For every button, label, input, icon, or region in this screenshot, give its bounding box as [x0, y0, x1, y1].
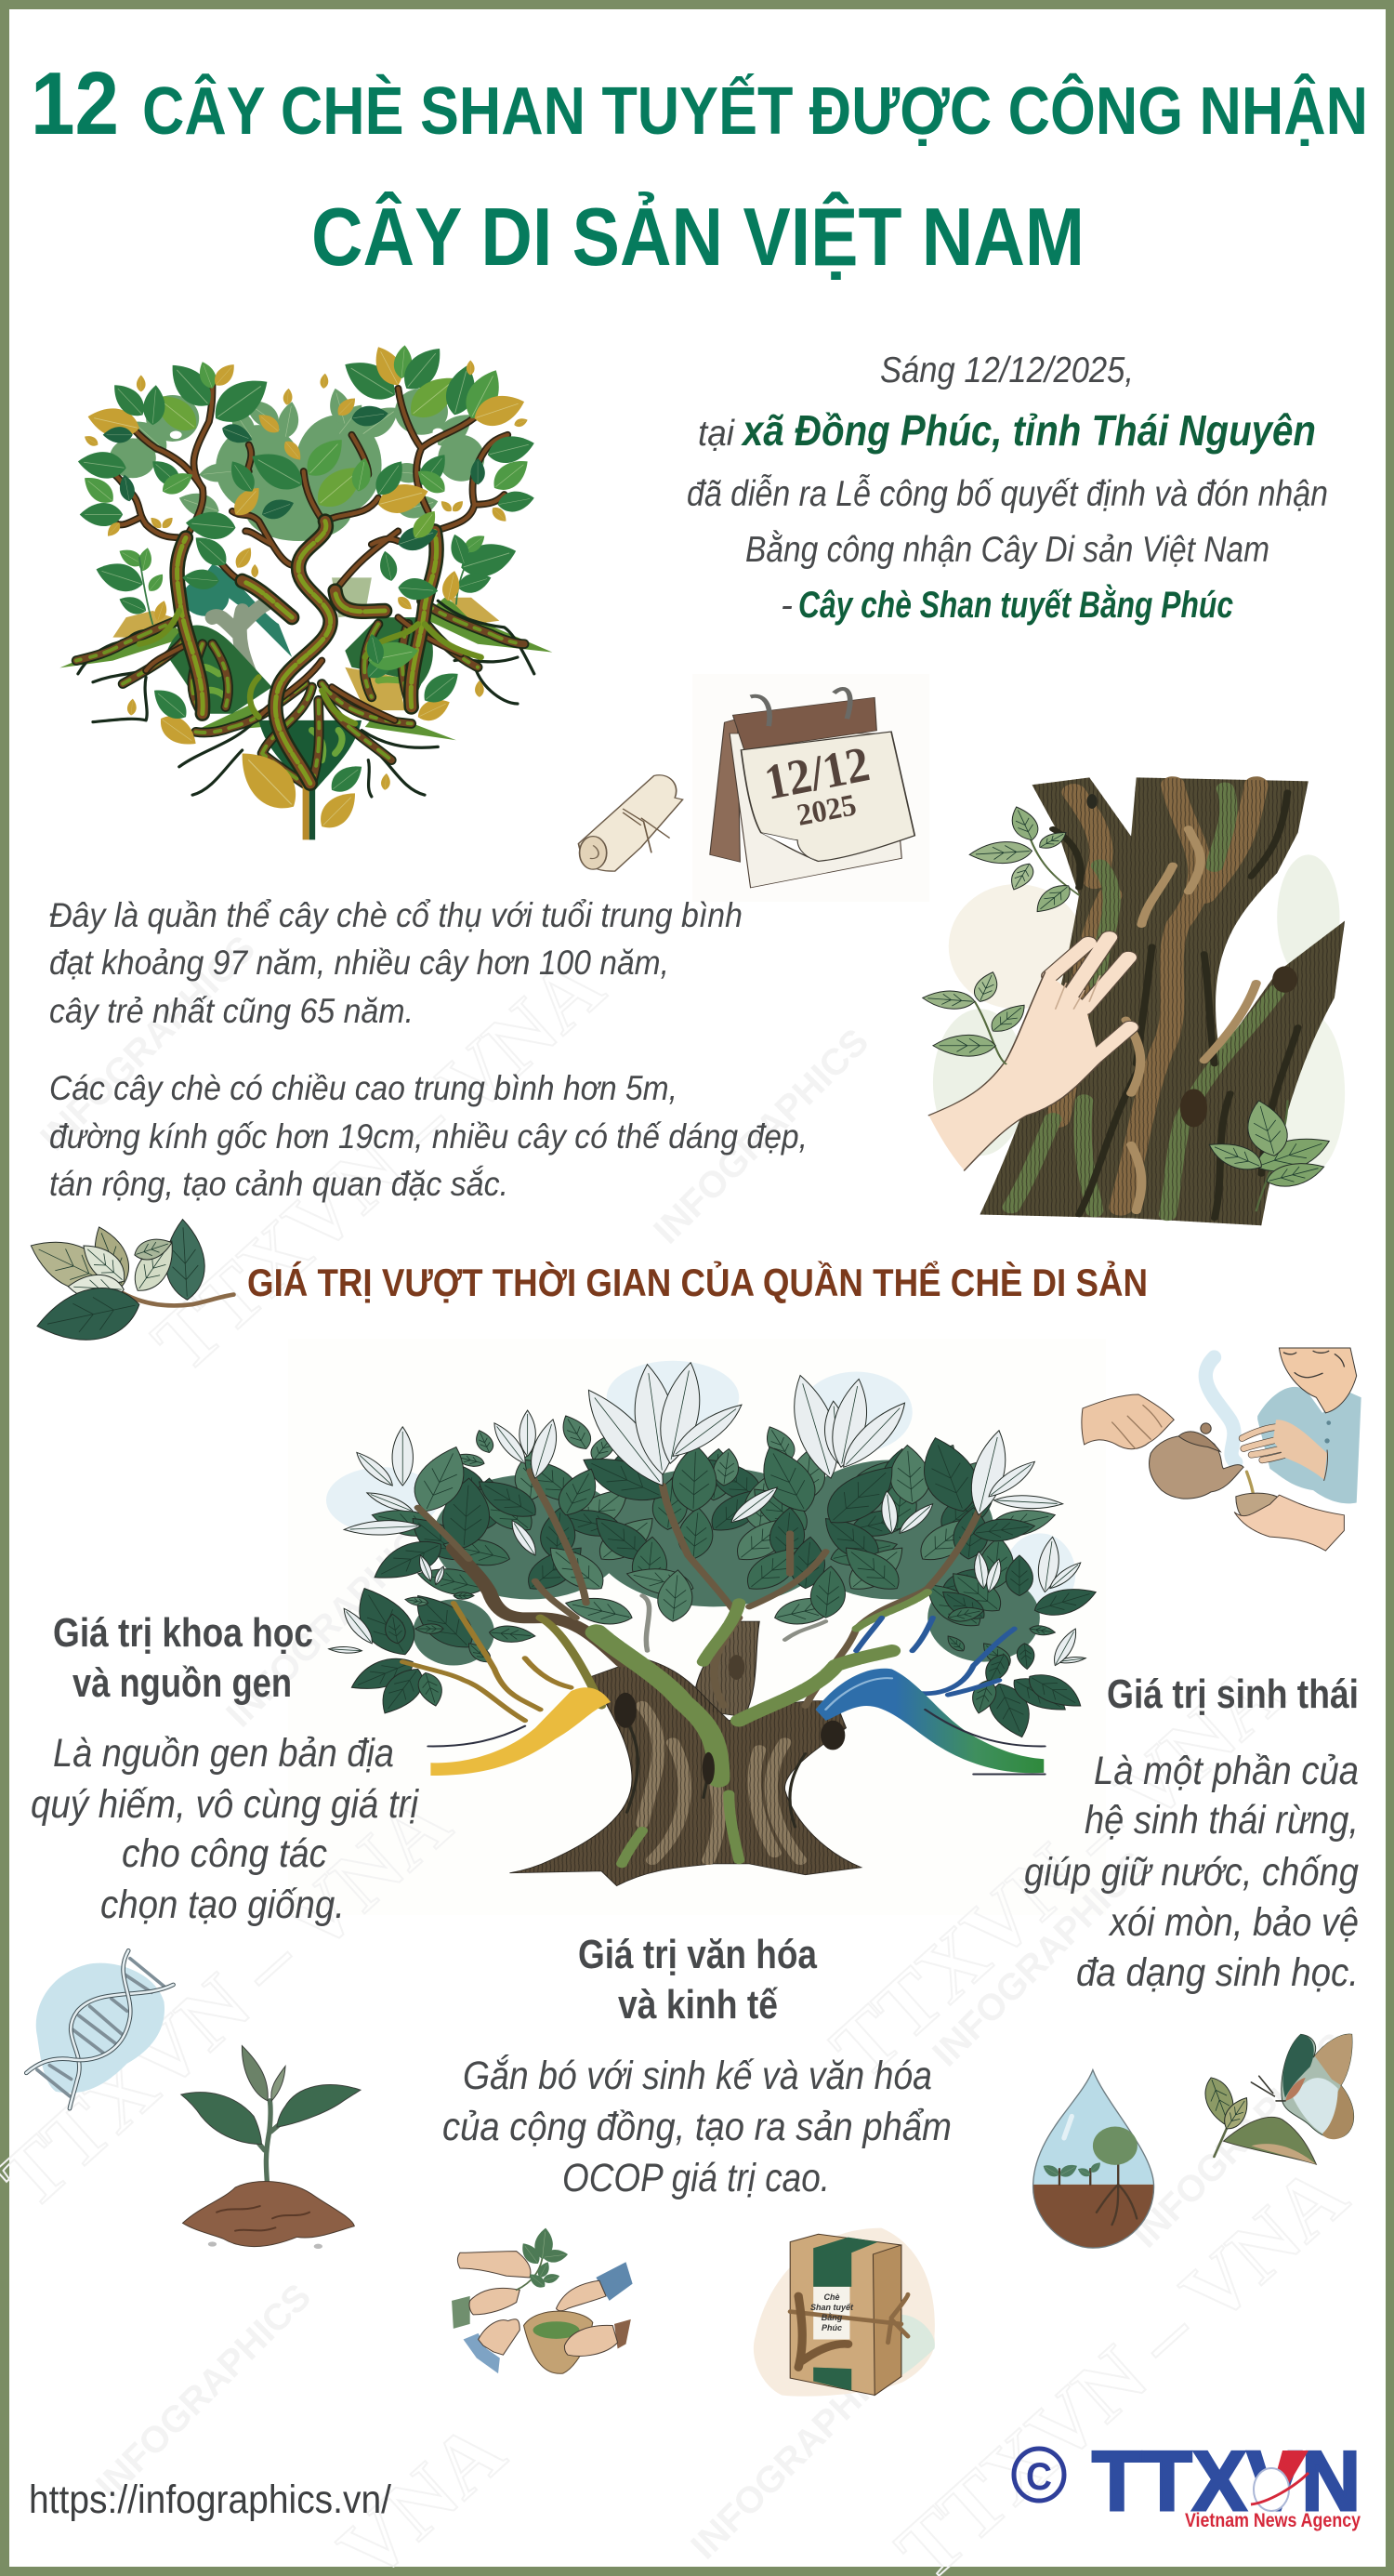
illustration: hand touching old tea trunk	[921, 777, 1345, 1225]
box label: Shan tuyết	[810, 2303, 854, 2312]
steam	[1205, 1357, 1236, 1462]
hand	[928, 937, 1130, 1170]
roots	[76, 601, 534, 797]
hands	[457, 2252, 618, 2356]
watermarks: INFOGRAPHICS	[683, 2336, 914, 2567]
value: science and genetics: cho công tác	[122, 1831, 327, 1876]
intro text block: Bằng công nhận Cây Di sản Việt Nam	[745, 530, 1269, 570]
trunk	[980, 777, 1345, 1225]
hand above cup	[1242, 1420, 1328, 1481]
yellow value branch	[402, 1603, 611, 1776]
value: ecology: đa dạng sinh học.	[1076, 1950, 1359, 1995]
pale background foliage	[110, 386, 484, 541]
value: science and genetics: và nguồn gen	[72, 1660, 292, 1706]
website url: https://infographics.vn/	[29, 2477, 391, 2522]
leaves: foliage crown	[76, 339, 537, 613]
intro text block: xã Đồng Phúc, tỉnh Thái Nguyên	[740, 406, 1316, 455]
illustration: large tea tree with coloured branches	[326, 1361, 1102, 1886]
branches	[418, 1471, 984, 1706]
canopy fill leaves	[367, 1448, 1060, 1634]
watermarks: INFOGRAPHICS	[925, 1843, 1155, 2074]
sleeves	[452, 2262, 633, 2373]
body text: size of the trees: đường kính gốc hơn 19cm, nhiều cây có thế dáng đẹp,	[49, 1117, 808, 1156]
tinted area behind large tree	[288, 1339, 1106, 1915]
value: science and genetics: chọn tạo giống.	[100, 1882, 345, 1927]
icon: tear-off calendar: 12/12	[760, 735, 874, 811]
value: science and genetics	[31, 1610, 419, 1927]
watermarks: INFOGRAPHICS	[88, 2276, 319, 2506]
value: culture and economy: và kinh tế	[618, 1982, 778, 2028]
water drop	[1033, 2070, 1154, 2248]
body text: size of the trees	[49, 1069, 808, 1203]
icon: rolled scroll	[578, 775, 683, 871]
body text: age of the trees: Đây là quần thể cây chè cổ thụ với tuổi trung bình	[49, 896, 743, 934]
pouring hand	[1082, 1394, 1174, 1449]
box label: Bằng	[822, 2312, 843, 2322]
branches and trunks	[99, 382, 507, 784]
canopy backing	[413, 1460, 1040, 1666]
watermarks: INFOGRAPHICS	[218, 1504, 449, 1735]
value: science and genetics: quý hiếm, vô cùng giá trị	[31, 1782, 419, 1827]
canopy top leaves	[342, 1412, 1102, 1741]
blue and green value branch	[816, 1618, 1045, 1774]
box label	[810, 2292, 854, 2332]
watercolor wash	[933, 854, 1345, 1174]
silver young leaves	[328, 1361, 1086, 1668]
value: culture and economy: OCOP giá trị cao.	[562, 2156, 830, 2200]
value: culture and economy: của cộng đồng, tạo ra sản phẩm	[442, 2105, 952, 2149]
logo: TTXVN: C	[1026, 2454, 1052, 2498]
DNA	[26, 1950, 174, 2108]
body text: size of the trees: Các cây chè có chiều cao trung bình hơn 5m,	[49, 1069, 677, 1107]
watermarks: INFOGRAPHICS	[1124, 2025, 1355, 2255]
icon: elder pouring tea	[1082, 1348, 1361, 1551]
logo: TTXVN: TTXVN	[1092, 2435, 1361, 2529]
watermarks: INFOGRAPHICS	[33, 928, 263, 1158]
icon: hands harvesting tea into basket	[452, 2227, 633, 2373]
intro text block	[687, 350, 1328, 626]
seedling	[181, 2046, 361, 2249]
watermarks	[0, 928, 1364, 2576]
moss	[597, 1592, 927, 1864]
body text: age of the trees: cây trẻ nhất cũng 65 năm.	[49, 992, 414, 1030]
leaves: side sprigs and lower leaves	[92, 531, 520, 836]
value: ecology: giúp giữ nước, chống	[1024, 1850, 1359, 1895]
leaf sprigs	[921, 804, 1338, 1210]
section heading: GIÁ TRỊ VƯỢT THỜI GIAN CỦA QUẦN THỂ CHÈ DI SẢN	[247, 1260, 1148, 1304]
icon: DNA helix and seedling	[26, 1950, 361, 2249]
value: ecology: xói mòn, bảo vệ	[1108, 1900, 1359, 1945]
value: ecology: Là một phần của	[1094, 1749, 1359, 1793]
value: ecology: hệ sinh thái rừng,	[1085, 1798, 1359, 1843]
watermarks: INFOGRAPHICS	[646, 1021, 876, 1251]
intro text block: tại	[698, 414, 735, 454]
title	[31, 54, 1368, 283]
inner grey tree	[182, 564, 372, 687]
body text: age of the trees: đạt khoảng 97 năm, nhiều cây hơn 100 năm,	[49, 944, 669, 982]
butterfly	[1251, 2034, 1354, 2139]
title: 12	[31, 54, 119, 153]
tea sprig	[517, 2227, 569, 2291]
icon: water drop ecosystem and butterfly	[1033, 2034, 1354, 2248]
stem	[303, 784, 315, 839]
icon: tear-off calendar	[692, 674, 929, 902]
logo: TTXVN: Vietnam News Agency	[1185, 2510, 1361, 2531]
icon: tea gift box	[754, 2228, 935, 2397]
value: culture and economy: Gắn bó với sinh kế và văn hóa	[463, 2054, 932, 2098]
basket	[524, 2311, 593, 2373]
value: science and genetics: Giá trị khoa học	[53, 1610, 313, 1656]
leaf sprig	[1199, 2073, 1316, 2164]
knots	[614, 1655, 845, 1785]
sky wash	[326, 1361, 1075, 1614]
teapot	[1150, 1423, 1254, 1499]
intro text block: -	[781, 586, 793, 626]
ground mounds and root masses	[59, 598, 552, 790]
value: culture and economy: Giá trị văn hóa	[578, 1932, 817, 1977]
intro text block: Sáng 12/12/2025,	[880, 350, 1134, 390]
trunk	[509, 1621, 861, 1886]
intro text block: Cây chè Shan tuyết Bằng Phúc	[798, 583, 1233, 626]
elder in blue shirt	[1257, 1348, 1361, 1503]
cup and holding hands	[1234, 1493, 1344, 1551]
value: culture and economy	[442, 1932, 952, 2200]
box label: Phúc	[822, 2323, 842, 2332]
watermarks: TTXVN – VNA	[135, 939, 621, 1390]
title: CÂY DI SẢN VIỆT NAM	[311, 191, 1085, 283]
value: ecology	[1024, 1671, 1359, 1995]
body text: age of the trees	[49, 896, 743, 1030]
value: science and genetics: Là nguồn gen bản địa	[53, 1731, 394, 1776]
box label: Chè	[823, 2292, 840, 2302]
icon: tea sprig	[22, 1218, 233, 1351]
watermarks: TTXVN – VNA	[813, 1645, 1299, 2096]
icon: tear-off calendar: 2025	[795, 788, 859, 833]
illustration: heart-shaped tea tree	[59, 339, 552, 839]
body text: size of the trees: tán rộng, tạo cảnh quan đặc sắc.	[49, 1165, 508, 1203]
